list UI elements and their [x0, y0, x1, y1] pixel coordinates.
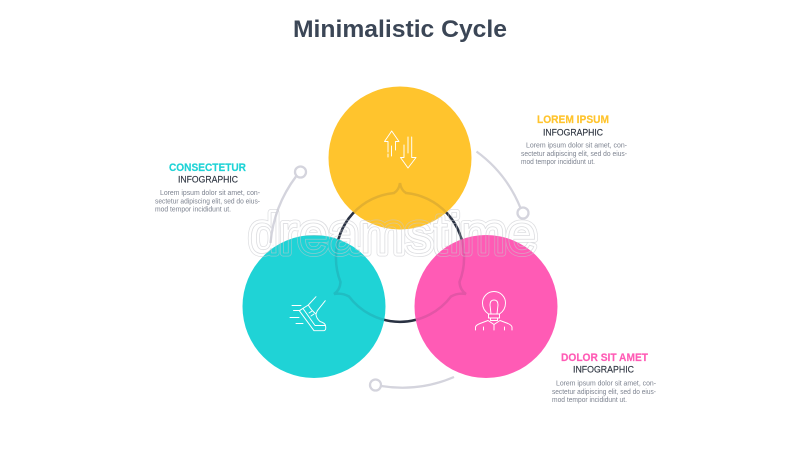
text block: Dolor Sit Amet: DOLOR SIT AMET	[561, 352, 648, 364]
title: Minimalistic Cycle	[293, 16, 507, 43]
cycle ring base	[334, 183, 466, 322]
connector: left	[270, 166, 306, 243]
text block: Dolor Sit Amet: INFOGRAPHIC	[573, 364, 634, 375]
text block: Consectetur: sectetur adipiscing elit, sed do eius-	[155, 198, 261, 206]
text block: Dolor Sit Amet: mod tempor incididunt ut.	[552, 397, 627, 404]
circle: yellow	[328, 86, 472, 230]
cycle ring overlap tint	[334, 183, 466, 322]
watermark	[248, 209, 538, 257]
text block: Consectetur: INFOGRAPHIC	[178, 174, 238, 185]
text block: Consectetur: mod tempor incididunt ut.	[155, 206, 231, 214]
connector: bottom	[370, 377, 454, 390]
text block: Lorem Ipsum: Lorem ipsum dolor sit amet, con-	[526, 142, 628, 150]
icon: person with light bulb head	[476, 292, 512, 330]
circle: teal	[242, 235, 386, 378]
text block: Lorem Ipsum: mod tempor incididunt ut.	[521, 159, 595, 166]
text block: Lorem Ipsum: LOREM IPSUM	[537, 114, 609, 126]
infographic canvas	[155, 20, 656, 404]
text block: Consectetur	[155, 162, 261, 214]
circle: pink	[414, 235, 558, 378]
connector: top right	[476, 152, 528, 218]
text block: Consectetur: CONSECTETUR	[169, 162, 246, 174]
text block: Dolor Sit Amet	[552, 352, 657, 404]
text block: Lorem Ipsum	[521, 114, 628, 166]
text block: Consectetur: Lorem ipsum dolor sit amet, con-	[160, 190, 261, 197]
text block: Dolor Sit Amet: sectetur adipiscing elit, sed do eius-	[552, 389, 657, 396]
text block: Dolor Sit Amet: Lorem ipsum dolor sit amet, con-	[556, 380, 657, 388]
icon: running shoe	[290, 297, 326, 331]
icon: up and down arrows	[384, 131, 416, 168]
text block: Lorem Ipsum: sectetur adipiscing elit, sed do eius-	[521, 151, 628, 158]
text block: Lorem Ipsum: INFOGRAPHIC	[543, 127, 603, 138]
